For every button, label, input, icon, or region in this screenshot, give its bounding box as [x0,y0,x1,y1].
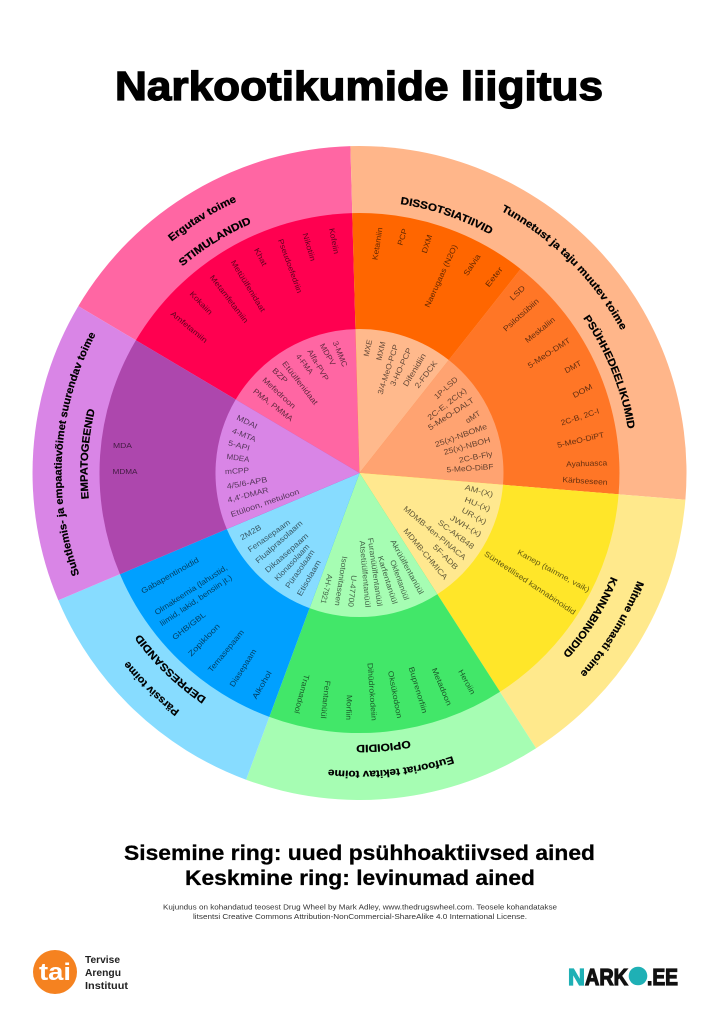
common opioids: Buprenorfiin [407,666,429,714]
dissociatives inner ring [356,329,449,473]
common stimulants: Nikotiin [301,232,317,262]
common depressants [140,555,274,701]
common psychedelics: DOM [571,382,594,400]
panel: depressants [58,473,360,780]
common dissociatives: Eeter [483,265,505,289]
common stimulants: Kofeiin [327,227,341,255]
common dissociatives [370,227,505,309]
new cannabinoids [401,483,495,582]
new dissociatives [362,339,440,396]
logo: Tervise Arengu Instituut [33,950,129,994]
heading: stimulants: STIMULANDID [179,218,250,266]
heading: depressants: DEPRESSANDID [136,636,206,704]
new opioids: Akrüülfentanüül [388,538,426,596]
heading: dissociatives: DISSOTSIATIIVID [400,196,492,234]
depressants inner ring [227,473,360,608]
heading: empathogens: EMPATOGEENID [80,409,94,499]
common psychedelics [501,283,608,487]
legend text: Keskmine ring: levinumad ained [185,867,535,890]
new depressants [238,518,323,598]
common dissociatives: DXM [420,234,434,254]
logo: NARKO.EE: .EE [647,964,678,990]
common depressants: Zopikloon [186,622,222,658]
credit text: litsentsi Creative Commons Attribution-NonCommercial-ShareAlike 4.0 International License. [193,914,527,921]
new dissociatives: MXM [374,341,388,361]
new empathogens: MDAI [235,413,259,431]
cannabinoids inner ring [360,473,503,594]
empathogens outer ring [33,306,359,600]
stimulants middle ring [136,213,360,473]
new opioids: AH-7921 [319,573,334,605]
common depressants: liimid, lakid, bensiin jt.) [158,573,234,628]
heading: effect: Suhtlemis- ja empaatiavõimet suurendav toime [54,332,95,576]
new depressants: Flualprasolaam [254,519,304,565]
logo: Tervise Arengu Instituut: tai [39,959,71,986]
common psychedelics: 2C-B, 2C-I [560,407,600,427]
common stimulants: Amfetamiin [169,309,209,345]
opioids inner ring [310,473,437,617]
depressants middle ring [120,473,360,717]
common depressants: Diasepaam [228,647,258,689]
legend text [124,842,595,890]
common stimulants: Pseudoefedriin [276,238,304,294]
common empathogens [112,441,138,476]
common depressants: Gabapentinoidid [140,555,200,596]
common depressants: Olmakeemia (lahustid, [153,563,229,617]
common dissociatives: PCP [396,228,409,246]
new psychedelics: αMT [464,409,482,425]
common stimulants: Metamfetamiin [208,273,250,325]
panel: dissociatives and psychedelics [350,146,686,500]
new empathogens: 4,4'-DMAR [227,485,270,505]
common cannabinoids: Kanep (taimne, vaik) [516,548,592,595]
logo: NARKO.EE: N [568,964,585,990]
new depressants: 2M2B [238,523,263,542]
common opioids: Metadoon [430,667,454,707]
common stimulants [169,227,341,345]
common dissociatives: Ketamiin [370,227,385,261]
new psychedelics: 5-MeO-DALT [426,396,476,432]
psychedelics inner ring [360,360,503,485]
depressants outer ring [58,473,360,780]
new psychedelics: 2C-E, 2C(x) [426,386,469,422]
new dissociatives: MXE [362,339,374,357]
panel: opioids [246,473,536,800]
panel: empathogens [32,306,360,600]
new cannabinoids: HU-(x) [463,495,492,514]
new dissociatives: 3-HO-PCP [388,347,414,387]
opioids middle ring [269,473,500,733]
common dissociatives: Naerugaas (N2O) [423,243,459,309]
new stimulants: 4-FMA [294,352,316,377]
cannabinoids middle ring [360,473,619,692]
new empathogens [225,413,301,519]
stimulants outer ring [78,146,360,473]
common psychedelics: 5-MeO-DiPT [556,430,605,450]
common psychedelics: Ayahuasca [566,458,608,469]
dissociatives middle ring [352,213,521,473]
heading: effect: Mitme uimasti toime [581,581,644,676]
empathogens inner ring [215,400,360,529]
common stimulants: Khat [252,246,269,268]
common cannabinoids [483,548,592,617]
new psychedelics: 25(x)-NBOH [443,435,491,457]
new depressants: Dikaasepaam [263,531,310,575]
new dissociatives: Difenidiin [401,352,428,388]
new psychedelics: 1P-LSD [432,375,460,401]
common empathogens: MDMA [112,467,138,476]
new opioids: Atsetüülfentanüül [358,540,372,608]
new stimulants: Mefedroon [261,375,297,411]
credit text [163,904,557,921]
new cannabinoids: AM-(X) [464,483,495,499]
common psychedelics: DMT [563,359,583,375]
new empathogens: Etüloon, metuloon [229,487,301,519]
new empathogens: 5-API [227,438,251,453]
new cannabinoids: MDMB-4en-PINACA [402,504,469,562]
new stimulants: Etüülfenidaat [280,359,320,407]
common empathogens: MDA [113,441,133,450]
panel: cannabinoids [360,473,686,748]
new stimulants: Alfa-PVP [305,348,331,382]
new stimulants: BZP [270,366,290,385]
heading: psychedelics: PSÜHHEDEELIKUMID [583,314,634,428]
new depressants: Pürasolaam [283,548,317,590]
common opioids [292,662,477,721]
common depressants: GHB/GBL [170,610,208,642]
new stimulants: 3-MMC [331,340,349,369]
new opioids: Furanüülfentanüül [366,537,384,607]
common depressants: Temasepaam [206,628,246,674]
logo: NARKO.EE: O [629,964,647,990]
new dissociatives: 2-FDCK [413,358,440,390]
new opioids: U-47700 [346,575,358,607]
logo: Tervise Arengu Instituut: Tervise [85,954,120,966]
new empathogens: MDEA [226,452,251,464]
heading: effect: Tunnetust ja taju muutev toime [503,204,626,330]
heading: opioids: OPIOIDID [356,740,410,752]
logo: NARKO.EE [568,964,678,990]
new cannabinoids: UR-(x) [460,506,488,527]
heading: effect: Eufooriat tekitav toime [328,756,454,778]
credit text: Kujundus on kohandatud teosest Drug Wheel by Mark Adley, www.thedrugswheel.com. Teosele kohandatakse [163,904,557,912]
new opioids: Okfentanüül [388,559,411,602]
new dissociatives: 3/4-MeO-PCP [376,343,400,396]
psychedelics middle ring [360,269,619,494]
new cannabinoids: 5F-ADB [431,543,460,571]
logo: Tervise Arengu Instituut: Arengu [85,967,121,979]
new cannabinoids: SC-AKB48 [436,518,476,551]
common stimulants: Kokaiin [188,289,214,317]
cannabinoids outer ring [360,473,685,748]
new empathogens: mCPP [225,466,249,476]
common stimulants: Metüülfenidaat [229,258,268,314]
title: Narkootikumide liigitus [115,63,603,109]
new psychedelics [426,375,494,474]
new cannabinoids: JWH-(x) [448,513,484,539]
new psychedelics: 5-MeO-DiBF [446,462,494,474]
logo: Tervise Arengu Instituut: Instituut [85,980,129,992]
common psychedelics: 5-MeO-DMT [526,336,572,370]
new stimulants [251,340,349,424]
new depressants: Fenasepaam [246,518,292,554]
stimulants inner ring [236,329,360,473]
new stimulants: PMA, PMMA [251,387,295,424]
common cannabinoids: Sünteetilised kannabinoidid [483,549,577,617]
common opioids: Fentanüül [319,680,332,719]
new opioids: Karfentanüül [376,555,399,605]
common psychedelics: Psilotsübiin [501,297,541,333]
heading: cannabinoids: KANNABINOIDID [564,576,618,657]
common opioids: Oksükodoon [386,670,404,719]
common opioids: Dihüdrokodeiin [365,662,379,721]
common opioids: Tramadool [292,674,311,715]
common dissociatives: Salvia [462,252,483,277]
new depressants: Klonasolaam [273,542,311,583]
new cannabinoids: MDMB-CHMICA [401,527,450,582]
new stimulants: MDPV [318,342,338,368]
new empathogens: 4/5/6-APB [226,475,268,491]
new opioids [319,537,426,608]
new psychedelics: 2C-B-Fly [458,449,493,465]
common depressants: Alkohol [250,669,274,701]
new depressants: Etisolaam [295,558,323,598]
legend text: Sisemine ring: uued psühhoaktiivsed ained [124,842,595,865]
common psychedelics: LSD [508,283,527,302]
panel: stimulants [78,146,360,473]
shared outer ring [350,146,687,500]
heading: effect: Pärssiv toime [125,662,180,716]
empathogens middle ring [99,340,360,574]
new psychedelics: 25(x)-NBOMe [434,422,488,449]
new empathogens: 4-MTA [231,426,258,444]
common opioids: Morfiin [344,695,354,720]
logo: NARKO.EE: ARK [585,964,628,990]
opioids outer ring [246,473,536,800]
heading: effect: Ergutav toime [168,197,236,242]
new opioids: Isotonitaseen [333,556,349,606]
common opioids: Heroiin [456,668,477,696]
common psychedelics: Kärbseseen [562,475,608,487]
common psychedelics: Meskaliin [523,315,557,345]
